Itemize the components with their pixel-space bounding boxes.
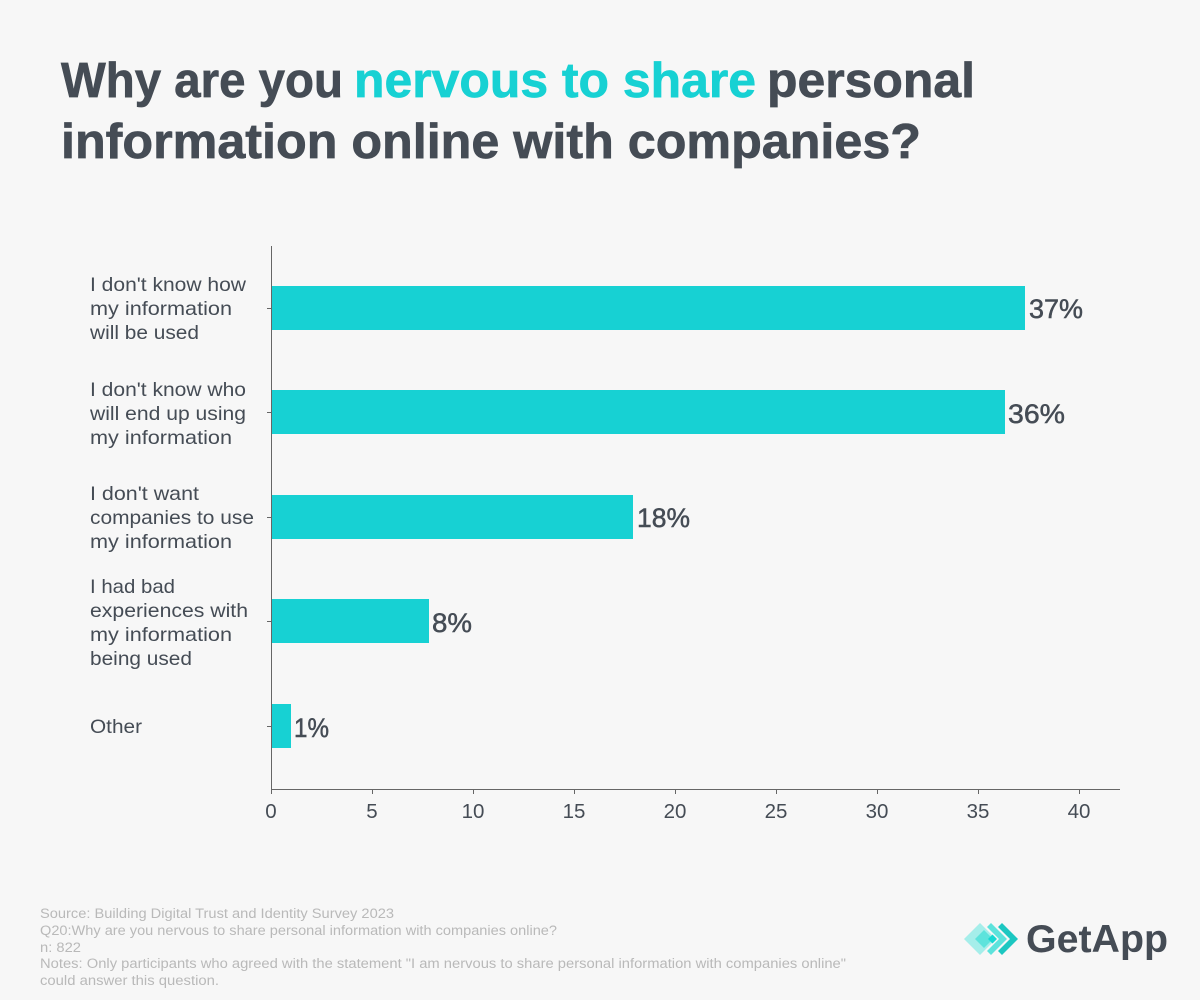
category labels: I had bad [90, 576, 175, 598]
logo: GetApp [964, 918, 1168, 961]
source notes [40, 906, 846, 988]
category labels [89, 274, 254, 738]
bar chart [89, 246, 1120, 823]
category labels: will be used [89, 322, 199, 344]
value labels [294, 294, 1083, 743]
x axis labels: 10 [462, 800, 484, 823]
category labels: I don't know who [90, 379, 246, 401]
source notes: n: 822 [40, 940, 81, 955]
title [61, 54, 975, 169]
title: nervous to share [354, 54, 756, 108]
x axis labels: 5 [366, 800, 378, 823]
category labels: my information [90, 624, 232, 646]
category labels: companies to use [90, 507, 254, 529]
value labels: 1% [294, 713, 329, 743]
value labels: 18% [637, 503, 690, 533]
source notes: Notes: Only participants who agreed with the statement "I am nervous to share personal information with companies online" [40, 956, 846, 971]
category labels: my information [90, 298, 232, 320]
category labels: I don't know how [90, 274, 247, 296]
icon: diamonds [964, 923, 1018, 955]
value labels: 8% [432, 608, 472, 638]
x axis labels: 20 [664, 800, 686, 823]
category labels: Other [90, 716, 143, 738]
source notes: Source: Building Digital Trust and Identity Survey 2023 [40, 906, 394, 921]
title: Why are you [61, 54, 343, 108]
source notes: could answer this question. [40, 973, 219, 988]
x axis labels: 15 [563, 800, 585, 823]
category labels: I don't want [90, 483, 200, 505]
title: information online with companies? [61, 115, 921, 169]
value labels: 36% [1008, 399, 1065, 429]
x axis labels: 25 [765, 800, 787, 823]
x axis labels: 40 [1068, 800, 1090, 823]
x axis labels [265, 800, 1090, 823]
value labels: 37% [1029, 294, 1083, 324]
category labels: experiences with [90, 600, 248, 622]
category labels: my information [90, 531, 232, 553]
x axis labels: 0 [265, 800, 277, 823]
x axis labels: 35 [967, 800, 989, 823]
bars [271, 286, 1025, 748]
category labels: my information [90, 427, 232, 449]
title: personal [767, 54, 975, 108]
source notes: Q20:Why are you nervous to share personal information with companies online? [40, 923, 557, 938]
category labels: will end up using [89, 403, 246, 425]
x axis labels: 30 [866, 800, 888, 823]
category labels: being used [90, 648, 192, 670]
logo: GetApp: GetApp [1026, 918, 1168, 961]
